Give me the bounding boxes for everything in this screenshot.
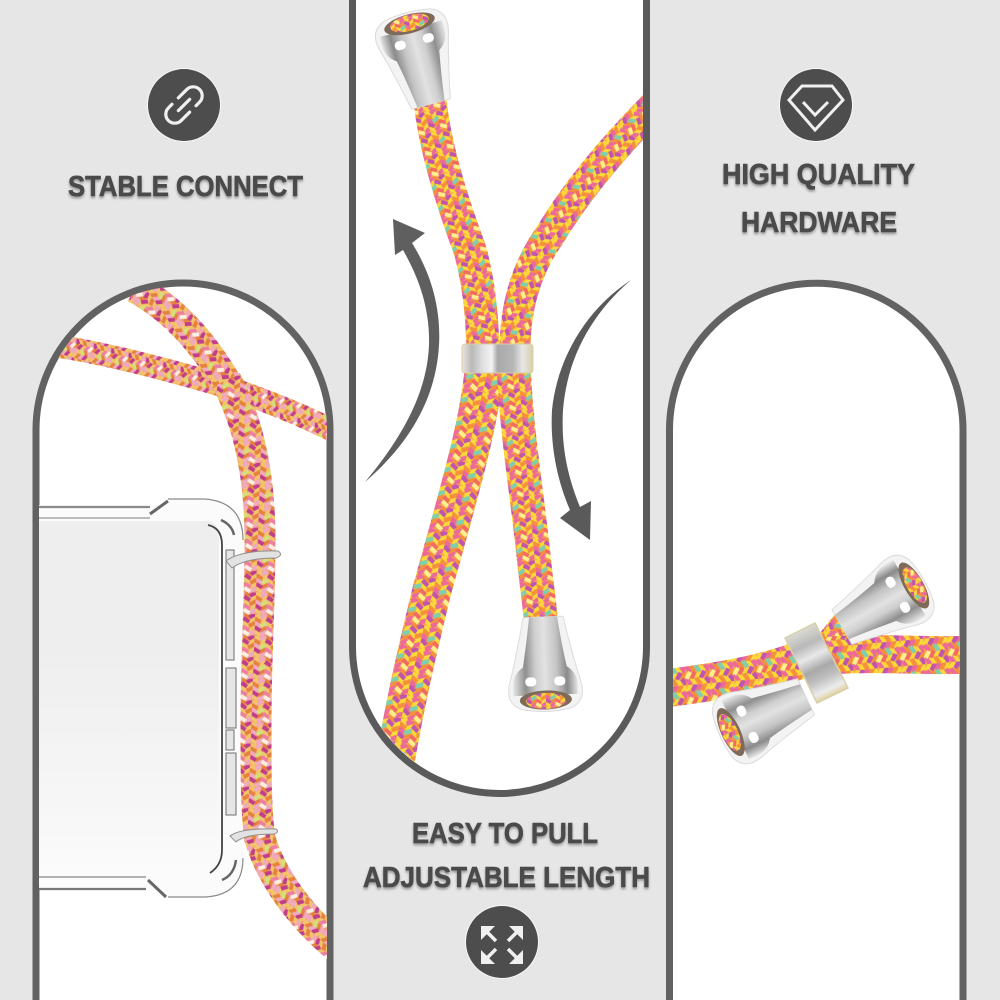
heading: easy to pull adjustable length: EASY TO PULL [412, 818, 598, 850]
rope: stub to cap [820, 615, 846, 638]
panel frame: right arch [670, 283, 963, 1000]
heading: stable connect: STABLE CONNECT [68, 171, 303, 203]
icon: link [147, 68, 221, 142]
bottom cap [506, 616, 583, 713]
lanyard [371, 3, 660, 780]
rope: front strand lower [226, 380, 260, 840]
arrow: up [365, 219, 439, 482]
rope: upper right [515, 100, 660, 350]
icon: diamond [779, 68, 853, 142]
heading: high quality hardware [722, 159, 915, 239]
panel: high quality hardware [668, 283, 965, 1000]
slider ring [462, 344, 533, 373]
rope: lower right [514, 370, 542, 640]
lower cap [712, 678, 815, 764]
panel: easy to pull [352, 0, 660, 794]
rope: upper left [430, 100, 483, 350]
top cap [374, 8, 451, 110]
heading: easy to pull adjustable length [363, 818, 650, 894]
slider ring [785, 623, 848, 703]
upper cap [832, 554, 934, 645]
phone case [39, 499, 243, 897]
top ring [226, 551, 281, 568]
necklace end hardware [668, 548, 965, 770]
bottom ring [230, 829, 278, 842]
rope: back strand [50, 345, 332, 430]
rope: lower left [392, 370, 484, 780]
arrow: down [552, 280, 631, 540]
rope: front strand end [259, 835, 338, 948]
panel frame: centre arch [352, 0, 646, 794]
heading: easy to pull adjustable length: ADJUSTABLE LENGTH [363, 862, 650, 894]
heading: high quality hardware: HARDWARE [741, 207, 897, 239]
panel frame: left arch [36, 283, 330, 1000]
rope: front strand [135, 288, 228, 385]
icon: expand arrows [465, 905, 539, 979]
rope: horizontal [668, 654, 965, 688]
phone case with rope [39, 288, 338, 948]
panel: stable connect [36, 283, 338, 1000]
heading: high quality hardware: HIGH QUALITY [722, 159, 915, 191]
